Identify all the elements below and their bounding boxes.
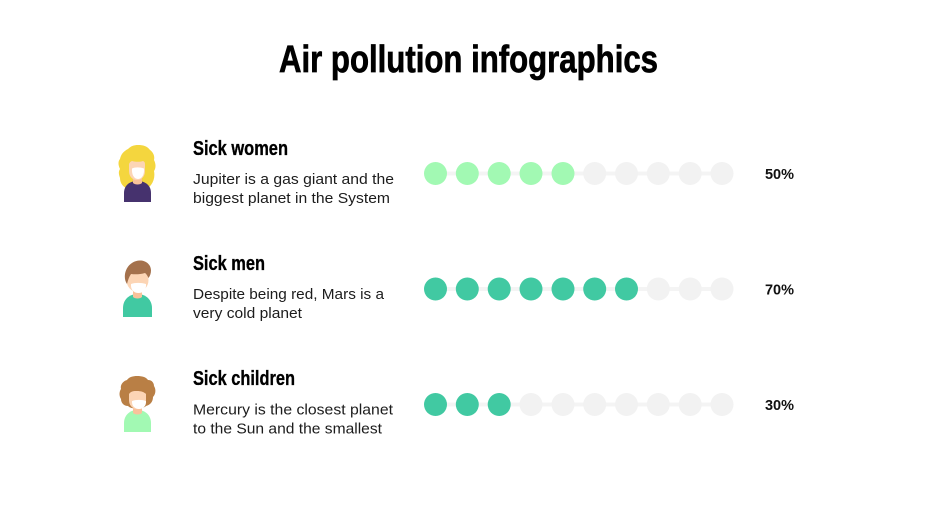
icon: child with mask xyxy=(120,376,155,432)
description xyxy=(193,287,385,322)
heading: Sick children xyxy=(193,368,295,390)
dot scale: 70% xyxy=(424,278,734,300)
description: Jupiter is a gas giant and the xyxy=(193,172,394,188)
description xyxy=(193,402,393,438)
description xyxy=(193,172,394,207)
value: 70% xyxy=(765,282,794,298)
icon: man with mask xyxy=(123,260,152,317)
panel: sick men xyxy=(123,253,794,322)
description: very cold planet xyxy=(193,306,302,322)
description: Mercury is the closest planet xyxy=(193,402,393,418)
panel: sick women xyxy=(118,138,794,207)
heading: Sick men xyxy=(193,253,265,275)
panel: sick children xyxy=(120,368,794,438)
heading: Sick women xyxy=(193,138,288,160)
dot scale: 30% xyxy=(424,393,734,416)
description: to the Sun and the smallest xyxy=(193,422,382,438)
description: Despite being red, Mars is a xyxy=(193,287,385,303)
description: biggest planet in the System xyxy=(193,191,390,207)
icon: woman with mask xyxy=(118,145,156,202)
title: Air pollution infographics xyxy=(279,39,658,81)
value: 30% xyxy=(765,398,794,414)
dot scale: 50% xyxy=(424,162,734,185)
value: 50% xyxy=(765,167,794,183)
